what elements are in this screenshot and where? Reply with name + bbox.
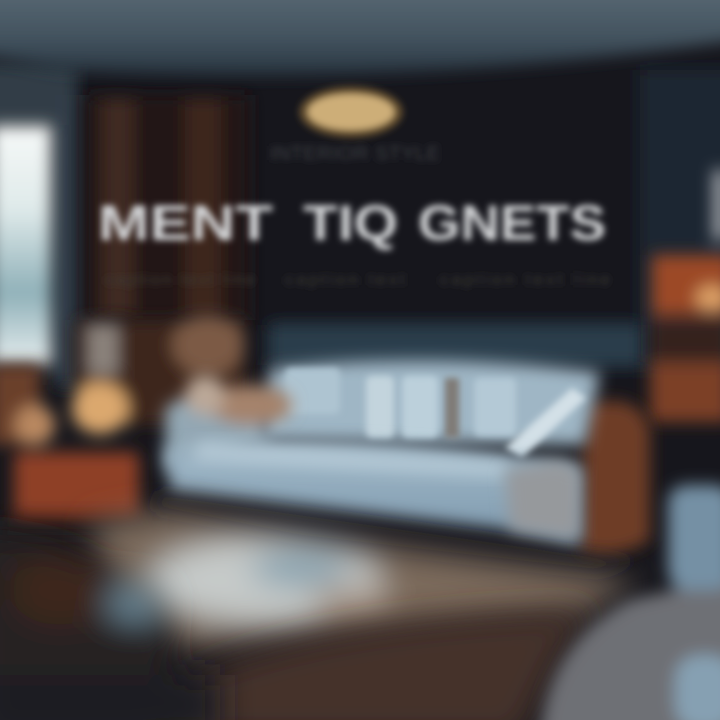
caption: caption text — [285, 270, 405, 289]
sofa cushions — [285, 368, 586, 458]
sofa seat — [165, 442, 580, 545]
title: TIQ — [303, 195, 398, 251]
sofa back — [260, 360, 600, 445]
seat highlight — [190, 442, 510, 476]
title — [98, 195, 606, 251]
foreground left chair — [0, 530, 220, 720]
window — [0, 125, 52, 365]
foreground right armchair — [540, 485, 720, 720]
ceiling lamp — [299, 86, 403, 138]
wood panels — [85, 95, 250, 320]
caption — [105, 270, 610, 289]
floor and rug — [90, 510, 640, 650]
caption: caption text line — [440, 270, 610, 289]
left arm and pillow — [165, 375, 292, 470]
sofa — [150, 360, 650, 575]
caption: caption text line — [105, 270, 255, 289]
title: GNETS — [418, 195, 606, 251]
right arm — [580, 401, 650, 553]
sofa front edge — [505, 460, 580, 540]
left side table and lamp — [0, 315, 245, 535]
ceiling — [0, 0, 720, 76]
subtitle: INTERIOR STYLE — [270, 143, 440, 165]
title: MENT — [98, 195, 273, 251]
sofa shadow — [150, 490, 640, 575]
foreground ottoman — [185, 610, 590, 720]
right cabinet — [650, 170, 720, 422]
